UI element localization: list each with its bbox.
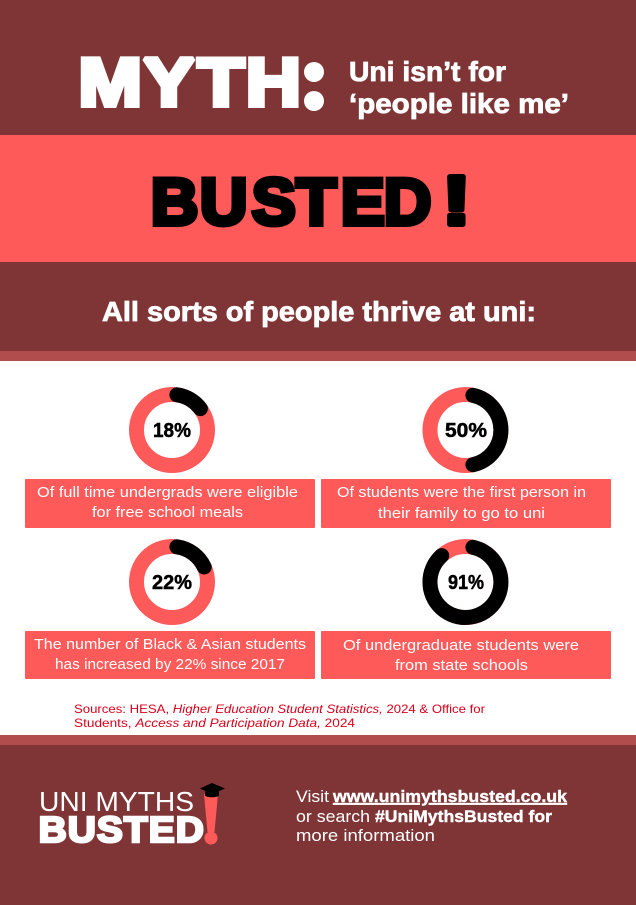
stat panel: 18% — [25, 394, 315, 528]
caption box: state schools — [321, 631, 611, 679]
background panel: top header band — [0, 0, 636, 135]
value: 22%: 22% — [152, 572, 192, 594]
caption box: state schools: from state schools — [395, 658, 528, 674]
heading: BUSTED!: BUSTED — [151, 164, 431, 238]
caption box: free school meals: for free school meals — [92, 505, 243, 521]
footer call to action: Visit — [296, 787, 329, 806]
sources note: Sources: HESA, Higher Education Student Statistics, 2024 & Office for — [74, 702, 485, 716]
sources note: Students, Access and Participation Data, 2024 — [74, 716, 355, 730]
background panel: coral busted band — [0, 135, 636, 262]
caption box: first in family — [321, 479, 611, 528]
caption box: free school meals: Of full time undergrads were eligible — [37, 485, 298, 501]
donut chart: 50% — [430, 394, 501, 466]
icon: graduation cap — [200, 783, 225, 797]
link: website: www.unimythsbusted.co.uk — [332, 787, 568, 806]
donut chart: 91% — [430, 546, 501, 618]
heading: myth statement: ‘people like me’ — [349, 88, 569, 119]
caption box: first in family: Of students were the first person in — [337, 485, 586, 501]
stat panel: 22% — [25, 546, 315, 679]
hashtag: #UniMythsBusted for — [375, 807, 552, 826]
caption box: state schools: Of undergraduate students were — [343, 638, 579, 654]
footer call to action: more information — [296, 826, 435, 845]
value: 50%: 50% — [445, 420, 487, 442]
background panel: footer band — [0, 745, 636, 905]
background panel: white statistics area — [0, 361, 636, 735]
footer call to action — [296, 787, 568, 845]
heading: myth statement — [349, 56, 569, 119]
caption box: Black and Asian students: The number of Black & Asian students — [34, 637, 306, 653]
caption box: Black and Asian students: has increased by 22% since 2017 — [55, 657, 285, 673]
icon: coral exclamation mark — [204, 794, 218, 844]
logo: Uni Myths Busted — [39, 783, 225, 850]
caption box: Black and Asian students — [25, 631, 315, 679]
heading: All sorts of people thrive at uni: All sorts of people thrive at uni: — [102, 296, 536, 327]
donut chart: 22% — [136, 546, 208, 618]
caption box: free school meals — [25, 479, 315, 528]
stat panel: 91% — [321, 546, 611, 679]
background panel: lower accent strip — [0, 735, 636, 745]
caption box: first in family: their family to go to uni — [378, 506, 545, 522]
footer call to action: or search — [296, 807, 370, 826]
value: 91%: 91% — [448, 572, 484, 594]
logo: Uni Myths Busted: UNI MYTHS — [39, 786, 194, 817]
stat panel: 50% — [321, 394, 611, 528]
donut chart: 18% — [136, 394, 208, 466]
value: 18%: 18% — [153, 420, 191, 442]
heading: myth statement: Uni isn’t for — [349, 56, 506, 87]
background panel: subtitle band — [0, 262, 636, 351]
title: MYTH: MYTH — [78, 45, 301, 121]
sources note — [74, 702, 485, 730]
background panel: upper accent strip — [0, 351, 636, 361]
logo: Uni Myths Busted: BUSTED — [39, 809, 205, 850]
heading: BUSTED!: ! — [442, 162, 471, 240]
